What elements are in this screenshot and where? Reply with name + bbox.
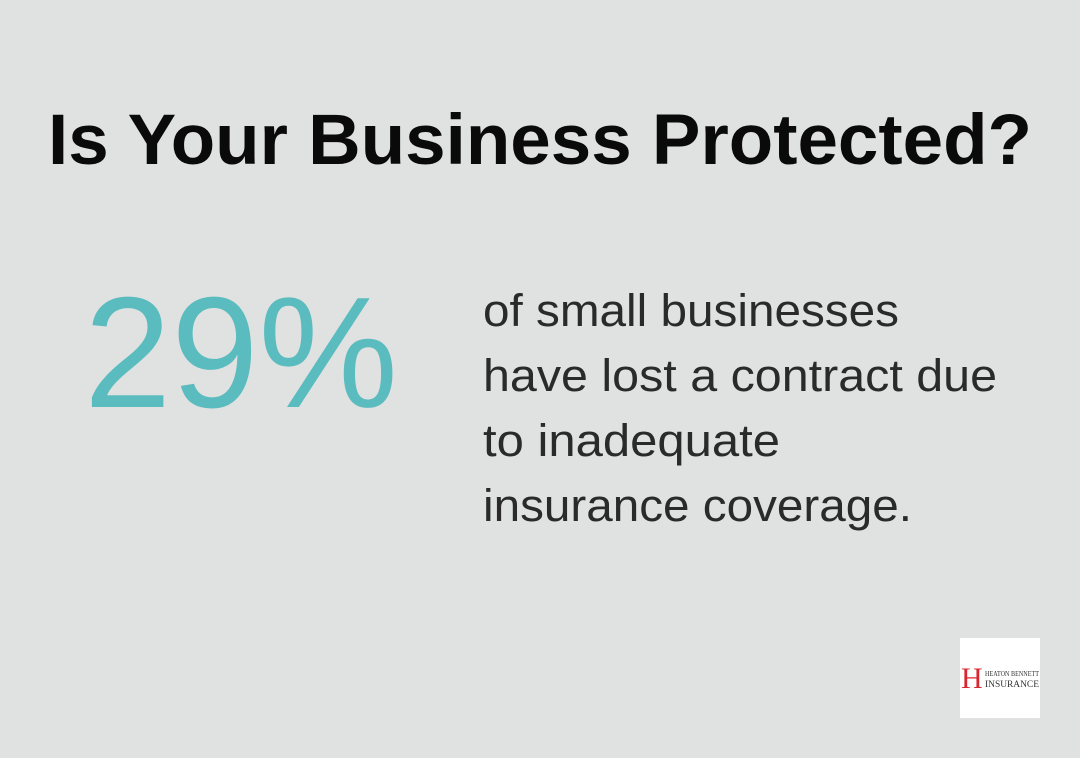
description text (483, 285, 997, 531)
logo: Heaton Bennett Insurance: HEATON BENNETT (985, 670, 1040, 678)
description text: of small businesses (483, 285, 899, 336)
statistic: 29%: 29% (84, 265, 398, 441)
logo: Heaton Bennett Insurance: H (961, 662, 983, 695)
description text: to inadequate (483, 415, 780, 466)
description text: have lost a contract due (483, 350, 997, 401)
title: Is Your Business Protected? (48, 101, 1032, 180)
logo: Heaton Bennett Insurance (960, 638, 1040, 718)
description text: insurance coverage. (483, 480, 912, 531)
logo: Heaton Bennett Insurance: INSURANCE (985, 679, 1040, 689)
